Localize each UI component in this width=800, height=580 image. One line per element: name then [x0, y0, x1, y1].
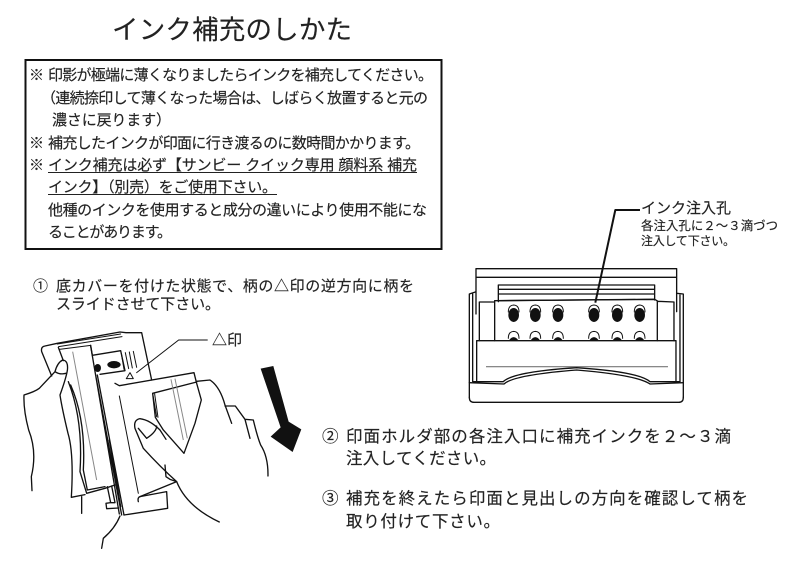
leader	[595, 210, 640, 303]
wrist	[102, 516, 120, 548]
panel: notes: 他種のインクを使用すると成分の違いにより使用不能にな	[48, 202, 427, 219]
triangle mark	[126, 373, 133, 379]
panel: notes: ※	[29, 135, 44, 152]
panel: notes: ※	[29, 67, 44, 84]
left hand	[24, 360, 85, 513]
cover and handle	[115, 373, 201, 515]
step 2 text: ②	[322, 427, 338, 446]
step 2 text: 印面ホルダ部の各注入口に補充インクを２～３滴	[346, 427, 731, 446]
panel: notes: 濃さに戻ります）	[52, 112, 171, 129]
panel: notes: インク】（別売）をご使用下さい。	[48, 179, 277, 196]
right hand	[135, 380, 268, 522]
lower ink holes	[508, 331, 645, 340]
step 2 text: 注入してください。	[346, 449, 496, 468]
panel: notes	[26, 60, 442, 249]
step 3 text: 取り付けて下さい。	[346, 512, 500, 531]
illustration: hands sliding the handle	[24, 332, 301, 548]
step 3 text: ③	[322, 489, 338, 508]
front tray	[477, 341, 676, 382]
label: ink injection hole: 注入して下さい。	[641, 234, 735, 248]
label: ink injection hole: 各注入孔に２～３滴づつ	[641, 218, 778, 233]
step 1 text: ①	[33, 278, 48, 295]
label: ink injection hole: インク注入孔	[641, 200, 731, 217]
stamp strips	[498, 285, 655, 302]
step 3 text	[322, 489, 748, 531]
panel: notes: インク補充は必ず【サンビー クイック専用 顔料系 補充	[48, 157, 417, 174]
step 1 text: 底カバーを付けた状態で、柄の△印の逆方向に柄を	[56, 278, 414, 295]
panel: notes: ることがあります。	[48, 224, 172, 241]
panel: notes: ※	[29, 157, 44, 174]
label: ink injection hole	[641, 200, 778, 248]
upper ink holes	[508, 305, 645, 322]
upper cover	[476, 269, 677, 314]
illustration: ink holder	[469, 210, 683, 402]
panel: notes: （連続捺印して薄くなった場合は、しばらく放置すると元の	[41, 90, 428, 107]
step 1 text	[33, 278, 414, 313]
label: triangle mark: △印	[212, 332, 242, 349]
panel: notes: 補充したインクが印面に行き渡るのに数時間かかります。	[48, 135, 420, 152]
holder body	[41, 332, 152, 515]
side walls	[469, 292, 683, 397]
arrow	[261, 366, 301, 452]
ink pad face	[479, 299, 674, 341]
step 3 text: 補充を終えたら印面と見出しの方向を確認して柄を	[346, 489, 748, 508]
leader	[137, 340, 207, 373]
step 2 text	[322, 427, 731, 468]
panel: notes: 印影が極端に薄くなりましたらインクを補充してください。	[48, 67, 433, 84]
step 1 text: スライドさせて下さい。	[56, 296, 220, 313]
title: インク補充のしかた	[112, 15, 352, 45]
